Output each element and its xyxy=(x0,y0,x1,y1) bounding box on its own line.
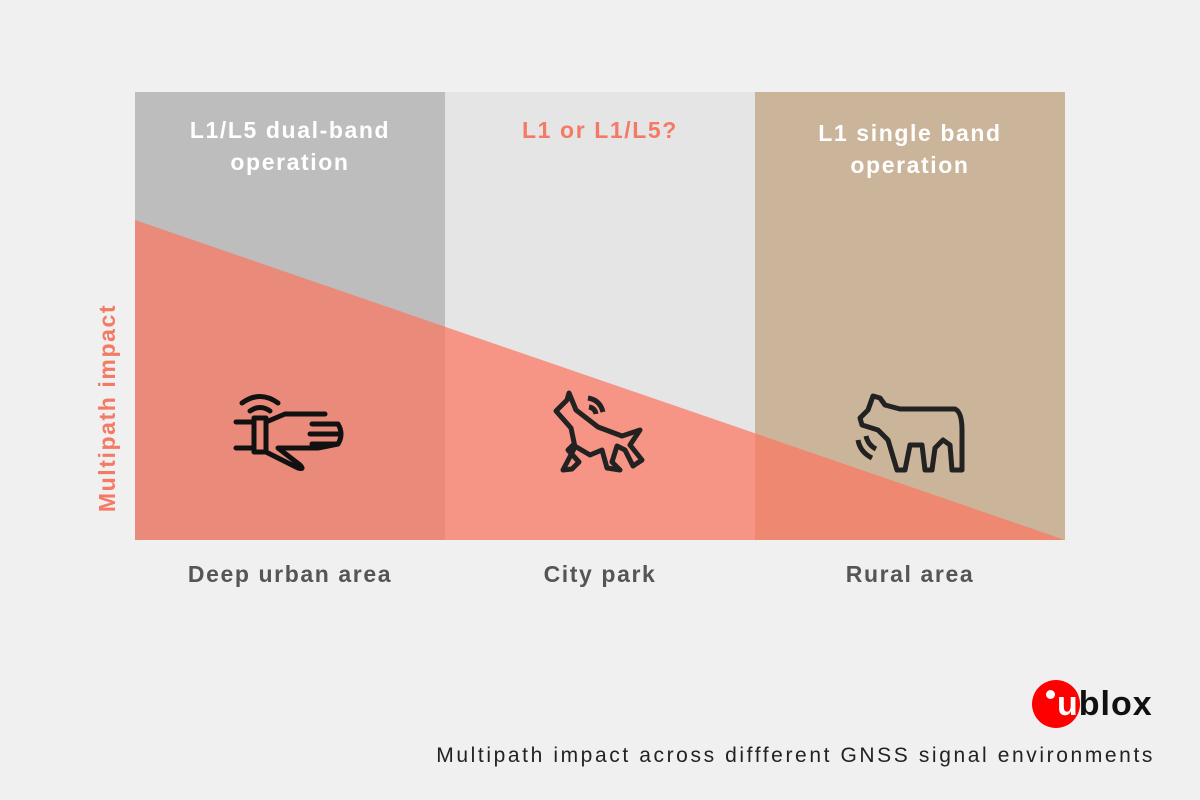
icon: cow xyxy=(858,396,962,470)
heading: L1 or L1/L5: L1 or L1/L5? xyxy=(522,117,678,143)
logo: u-blox xyxy=(1032,680,1153,728)
heading: single band: operation xyxy=(850,152,970,178)
panel: deep urban background xyxy=(135,92,445,540)
heading: dual-band: operation xyxy=(230,149,350,175)
multipath triangle: rural xyxy=(755,433,1065,540)
heading: single band: L1 single band xyxy=(818,120,1002,146)
multipath triangle: urban xyxy=(135,220,445,540)
label: city park: City park xyxy=(544,561,656,587)
icon: dog xyxy=(556,393,642,470)
heading: dual-band xyxy=(190,117,390,175)
label: deep urban: Deep urban area xyxy=(188,561,392,587)
caption: Multipath impact across diffferent GNSS signal environments xyxy=(436,744,1155,767)
label: rural: Rural area xyxy=(846,561,974,587)
panel: city park background xyxy=(445,92,755,540)
multipath triangle: park xyxy=(445,327,755,540)
y-axis label: Multipath impact xyxy=(94,304,120,512)
panel: rural background xyxy=(755,92,1065,540)
heading: dual-band: L1/L5 dual-band xyxy=(190,117,390,143)
icon: wrist with wearable xyxy=(236,396,341,469)
logo: u-blox: ublox xyxy=(1057,685,1153,723)
heading: single band xyxy=(818,120,1002,178)
